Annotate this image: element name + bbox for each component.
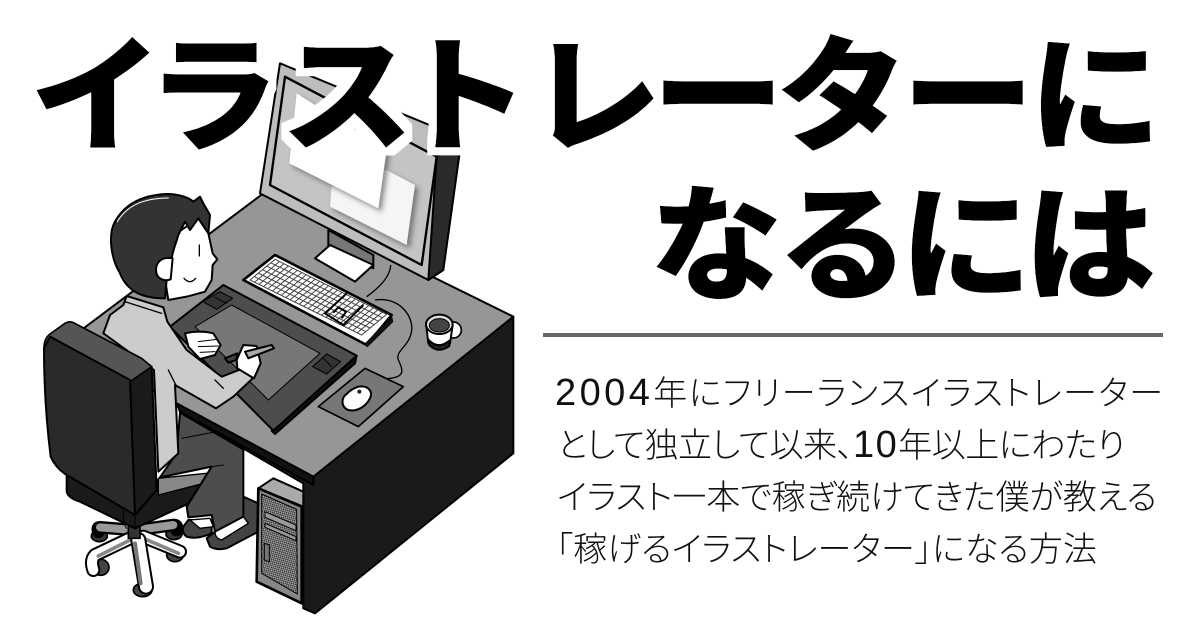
face xyxy=(165,218,217,300)
description text: として独立して以来、10年以上にわたり xyxy=(557,424,1125,466)
computer monitor xyxy=(260,63,462,282)
feet and shoes xyxy=(207,497,258,549)
chair seat xyxy=(67,473,208,528)
pen tablet xyxy=(170,285,357,434)
ear xyxy=(156,258,173,280)
title xyxy=(30,28,1161,317)
description text: 2004年にフリーランスイラストレーター xyxy=(555,372,1163,414)
coffee cup xyxy=(426,315,461,350)
mouse pad and mouse xyxy=(318,368,403,427)
description text xyxy=(555,372,1163,569)
left hand xyxy=(185,332,221,359)
chair back xyxy=(44,322,157,515)
person xyxy=(103,194,274,549)
hair xyxy=(111,194,210,298)
trousers xyxy=(160,413,243,532)
title: line 1: イラストレーターに xyxy=(30,28,1161,168)
description text: イラスト一本で稼ぎ続けてきた僕が教える xyxy=(557,479,1157,517)
computer tower xyxy=(257,478,303,603)
chair base xyxy=(91,523,183,597)
pen and right hand xyxy=(237,345,261,378)
illustration: person at desk xyxy=(44,63,513,613)
cables xyxy=(367,265,412,387)
title: line 2: なるには xyxy=(650,177,1156,317)
keyboard xyxy=(243,255,393,347)
desk xyxy=(64,193,513,613)
description text: 「稼げるイラストレーター」になる方法 xyxy=(556,531,1097,569)
divider rule xyxy=(543,333,1163,337)
jacket xyxy=(103,296,253,472)
